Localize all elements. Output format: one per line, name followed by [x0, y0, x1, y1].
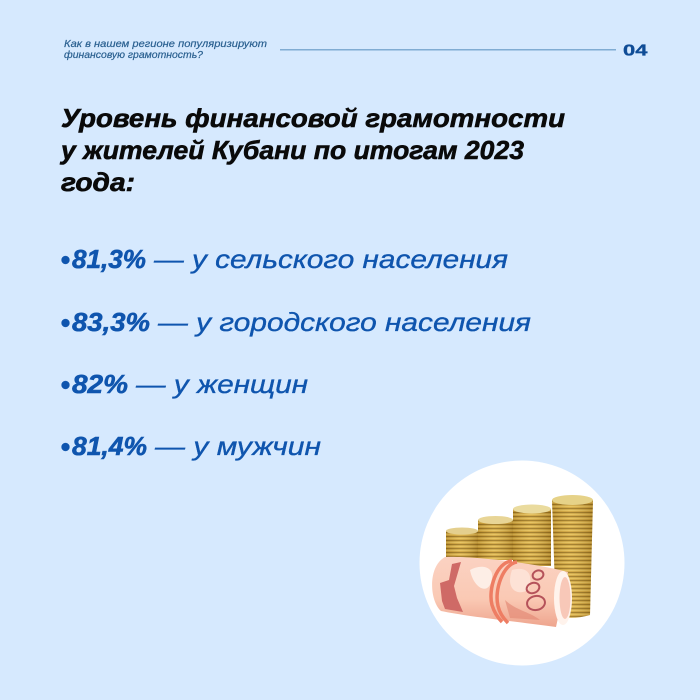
white circle [420, 460, 624, 666]
coin stack 2 [478, 516, 513, 560]
title [59, 103, 565, 197]
header caption: Как в нашем регионе популяризируют [64, 38, 267, 50]
item: rural population: — у сельского населения [153, 244, 508, 274]
list of statistics [62, 244, 531, 461]
header caption [64, 38, 267, 61]
title: года: [61, 167, 135, 197]
item: women: — у женщин [135, 369, 308, 399]
item: rural population: 81,3% [72, 244, 146, 274]
page number: 04 [623, 42, 648, 60]
coin stack 3 [513, 504, 551, 566]
denomination zeros [525, 569, 546, 611]
item: men: 81,4% [72, 431, 147, 461]
roll end [554, 571, 572, 625]
item: urban population: 83,3% [72, 307, 150, 337]
item: women [62, 369, 308, 399]
illustration: coins and banknote roll [420, 460, 624, 666]
title: у жителей Кубани по итогам 2023 [59, 135, 525, 165]
banknote roll [432, 557, 572, 627]
title: Уровень финансовой грамотности [61, 103, 565, 133]
header rule [280, 49, 616, 50]
rubber band [491, 561, 517, 623]
header caption: финансовую грамотность? [64, 49, 203, 61]
coin stack 1 [446, 528, 478, 558]
coin stack 4 [552, 495, 593, 618]
item: men: — у мужчин [154, 431, 321, 461]
item: women: 82% [72, 369, 128, 399]
item: rural population [62, 244, 508, 274]
item: urban population [62, 307, 531, 337]
item: men [62, 431, 321, 461]
item: urban population: — у городского населения [157, 307, 531, 337]
